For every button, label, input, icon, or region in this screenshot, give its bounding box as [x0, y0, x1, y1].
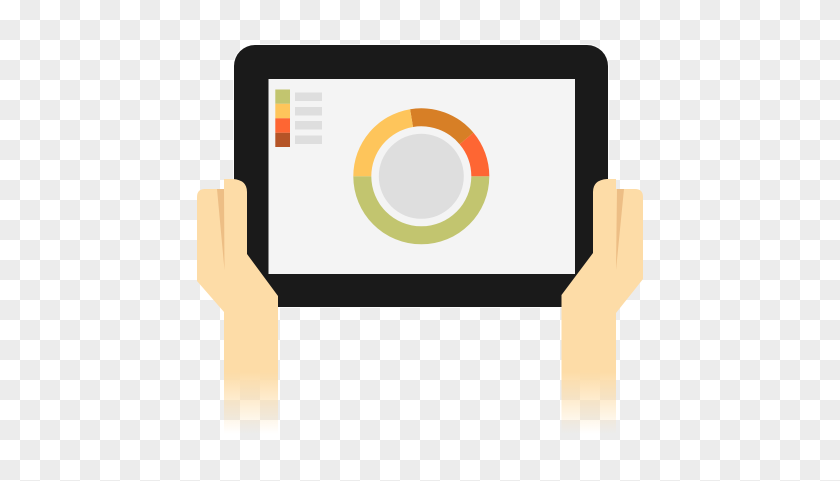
legend swatch: brown [275, 133, 290, 147]
legend label bars [295, 92, 322, 144]
donut chart [353, 108, 489, 244]
segment: green [353, 176, 489, 244]
legend swatch: yellow [275, 104, 290, 118]
legend [275, 90, 322, 147]
segment: yellow [353, 109, 413, 176]
tablet screen [268, 79, 575, 274]
tablet halo [233, 44, 609, 308]
left hand [197, 179, 278, 436]
legend swatch: green [275, 90, 290, 104]
right hand shape [562, 179, 643, 436]
right hand [562, 179, 643, 436]
segment: orange [460, 133, 489, 176]
segment: brown [410, 108, 473, 144]
right finger shadow [616, 189, 624, 270]
tablet body [234, 45, 608, 307]
legend swatch: orange [275, 118, 290, 133]
left hand shape [197, 179, 278, 436]
donut centre disc [379, 134, 464, 219]
left finger shadow [217, 189, 224, 270]
tablet [233, 44, 609, 308]
